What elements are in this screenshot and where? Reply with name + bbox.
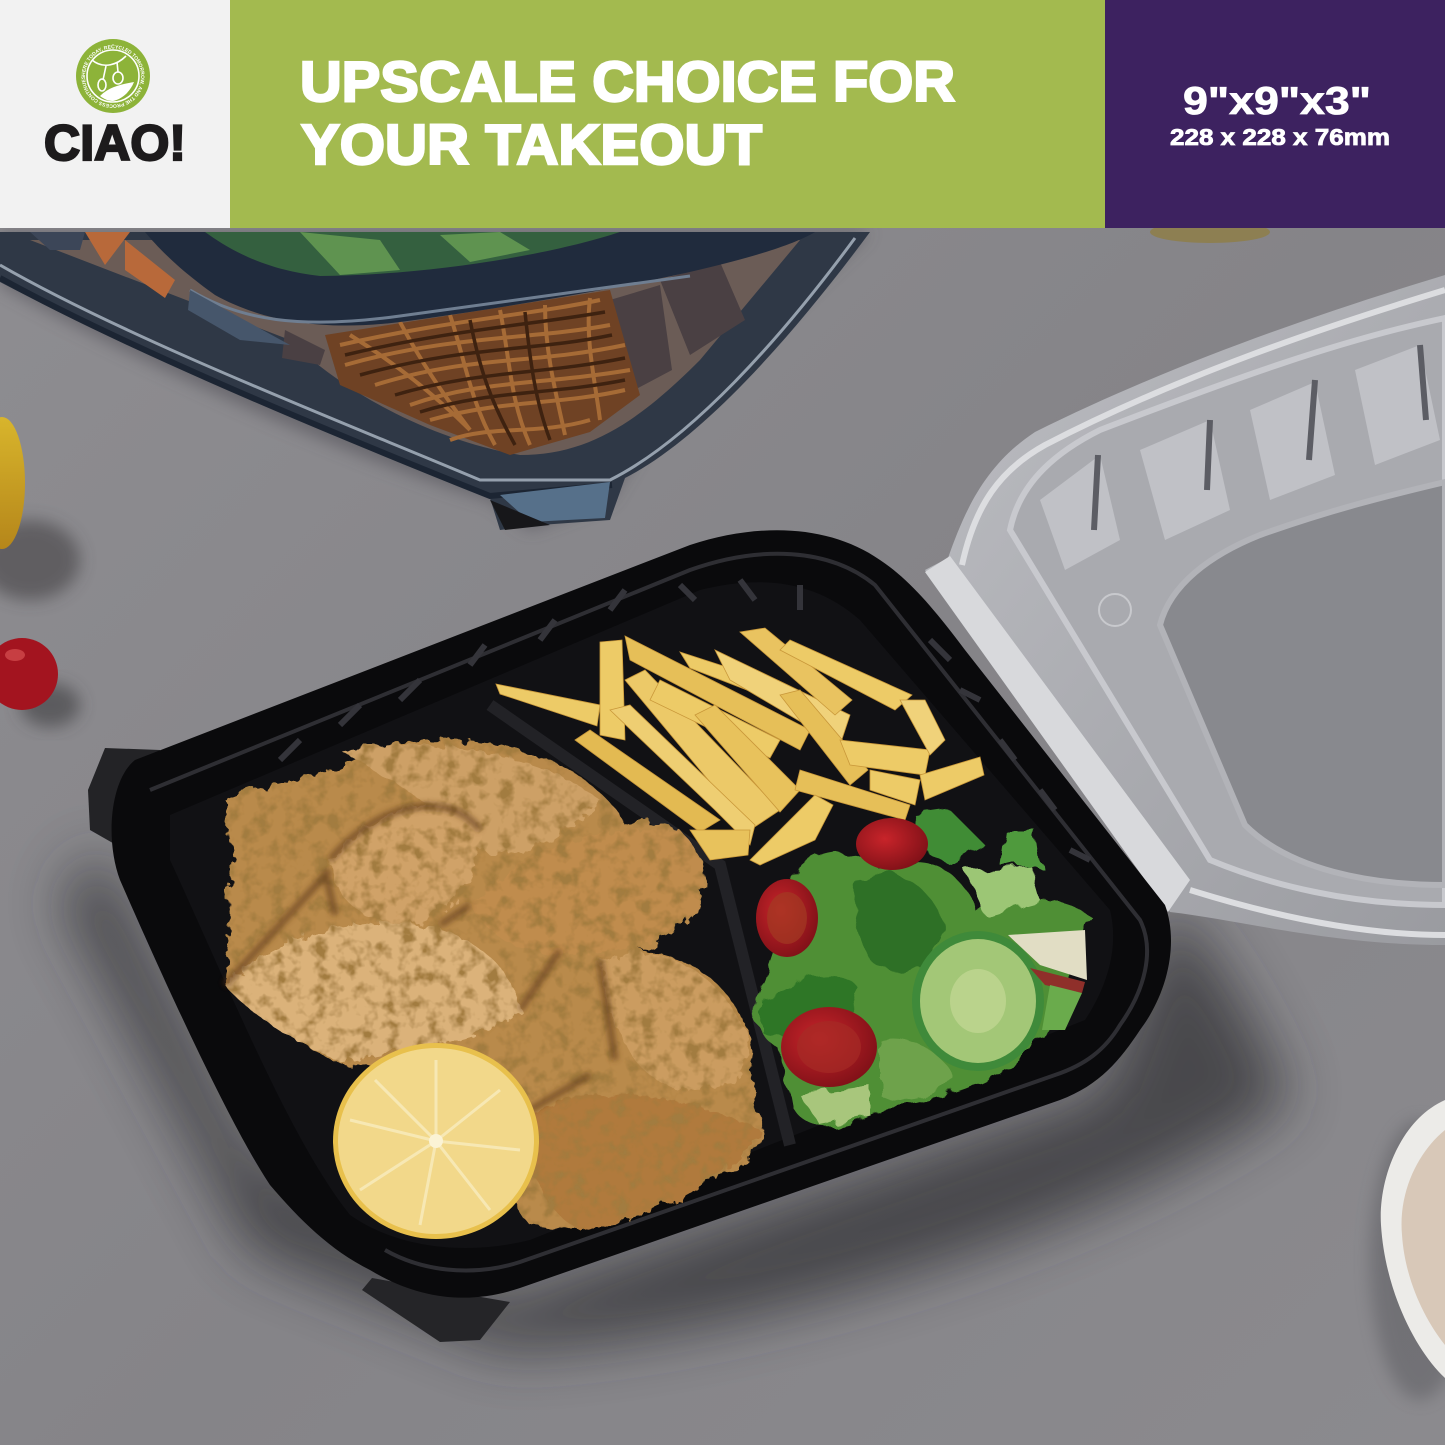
lid hinge edge — [925, 556, 1190, 912]
lemon at left edge — [0, 417, 80, 600]
white bowl bottom right — [1370, 1100, 1445, 1400]
size dimensions — [1170, 80, 1390, 150]
fried chicken — [225, 740, 763, 1230]
lemon slice — [333, 1043, 539, 1239]
header: purple size panel — [1105, 0, 1445, 228]
glass veggies left of tray — [85, 232, 175, 298]
tomato left — [756, 879, 818, 957]
title — [300, 50, 955, 177]
cherry tomato at left edge — [0, 638, 80, 727]
shadow of main tray — [60, 850, 1290, 1350]
french fries — [496, 628, 984, 865]
onion slice — [1008, 930, 1087, 980]
size dimensions: 228 x 228 x 76mm — [1170, 124, 1390, 150]
lettuce — [755, 810, 1090, 1126]
salad — [755, 810, 1090, 1126]
shadows between chicken pieces — [225, 806, 615, 1110]
lid inner rim — [1010, 318, 1445, 905]
tray ribs — [280, 580, 1090, 860]
lid outer rim highlight — [962, 290, 1445, 935]
tray body — [112, 530, 1171, 1298]
main black tray — [88, 530, 1171, 1342]
header: green title panel — [230, 0, 1105, 228]
tray tab left — [88, 748, 160, 850]
clear hinged lid — [925, 275, 1445, 945]
noodle compartment — [30, 240, 800, 455]
inner compartment walls — [170, 582, 1113, 1248]
lettuce bit right — [1042, 985, 1082, 1030]
title: UPSCALE CHOICE FOR — [300, 50, 955, 114]
header: logo panel — [0, 0, 230, 228]
bottle base at top — [1150, 221, 1270, 243]
size dimensions: 9"x9"x3" — [1183, 80, 1371, 123]
logo badge — [76, 39, 150, 113]
divider — [490, 705, 790, 1145]
tomato bottom — [781, 1007, 877, 1087]
tray tab bottom — [362, 1278, 510, 1342]
logo wordmark: CIAO! — [44, 115, 186, 171]
rib blocks — [282, 262, 745, 395]
rim highlight — [150, 554, 1147, 1271]
tomato top — [856, 818, 928, 870]
tray rim — [0, 232, 870, 530]
lid flat panel — [1160, 482, 1445, 885]
cucumber slice — [912, 931, 1044, 1071]
noodles — [325, 290, 640, 455]
title: YOUR TAKEOUT — [301, 113, 762, 177]
top tray with noodles — [0, 232, 870, 530]
lid ribs — [1040, 345, 1440, 570]
rim highlights — [0, 238, 855, 480]
second tray with salad — [145, 232, 815, 326]
